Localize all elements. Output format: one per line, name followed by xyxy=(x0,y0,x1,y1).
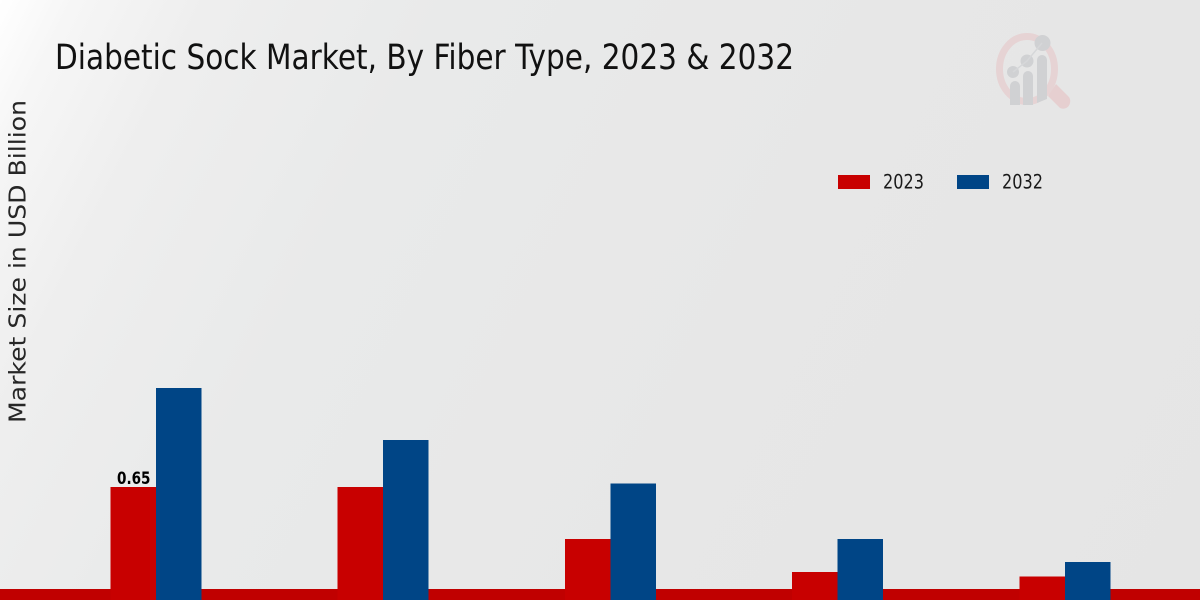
y-axis label: Market Size in USD Billion xyxy=(6,100,32,423)
bar group 2 xyxy=(338,440,428,600)
title: Diabetic Sock Market, By Fiber Type, 2023 & 2032 xyxy=(55,38,794,78)
legend item: 2032 xyxy=(957,170,1043,194)
bar group 5 xyxy=(1020,562,1110,600)
value label: 0.65 xyxy=(117,469,150,488)
bar chart xyxy=(0,388,1200,600)
legend xyxy=(838,170,1043,194)
baseline band xyxy=(0,589,1200,600)
bar group 4 xyxy=(792,539,883,600)
legend item: 2023: 2023 xyxy=(883,170,924,194)
icon: watermark logo xyxy=(1000,35,1070,109)
legend item: 2023 xyxy=(838,170,924,194)
legend item: 2032: 2032 xyxy=(1002,170,1043,194)
bar group 3 xyxy=(565,484,656,600)
bar group 1 xyxy=(110,388,202,600)
